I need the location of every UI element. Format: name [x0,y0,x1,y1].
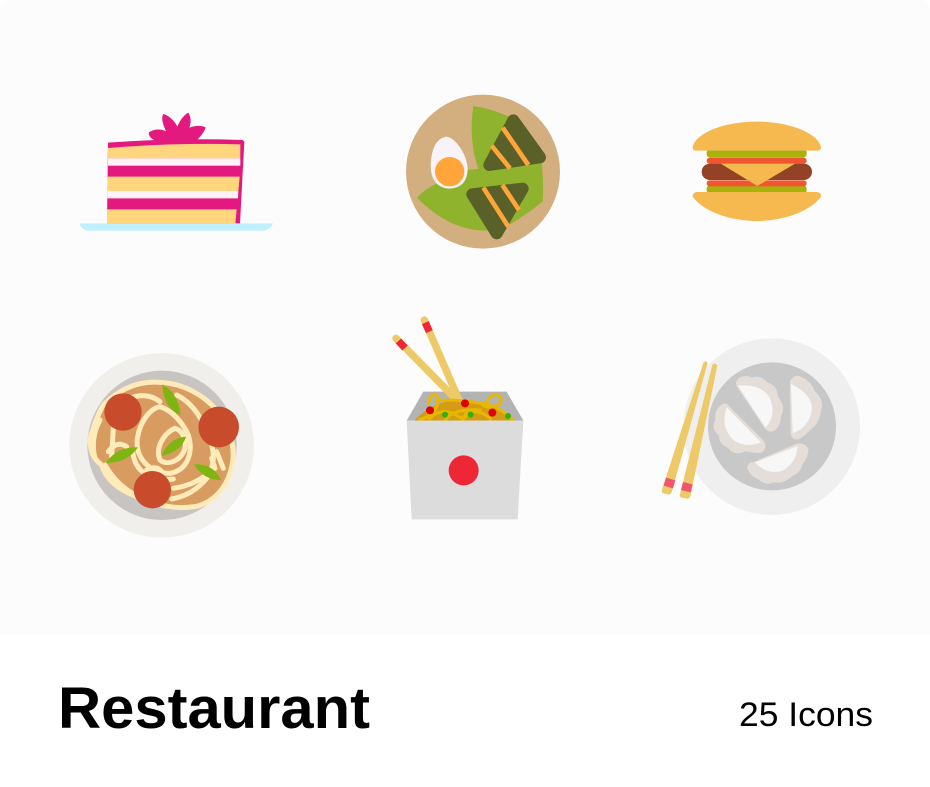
title: Restaurant [58,676,370,741]
icon: rice dumplings on a plate [406,95,560,249]
icon: dumplings with chopsticks [662,338,860,515]
icon: layered cake slice [79,113,273,231]
icon: burger [693,122,821,221]
icon: noodle takeout box [396,320,523,519]
icon: spaghetti with meatballs [69,353,254,538]
panel: footer caption [58,676,873,741]
icon count: 25 Icons [739,696,873,734]
